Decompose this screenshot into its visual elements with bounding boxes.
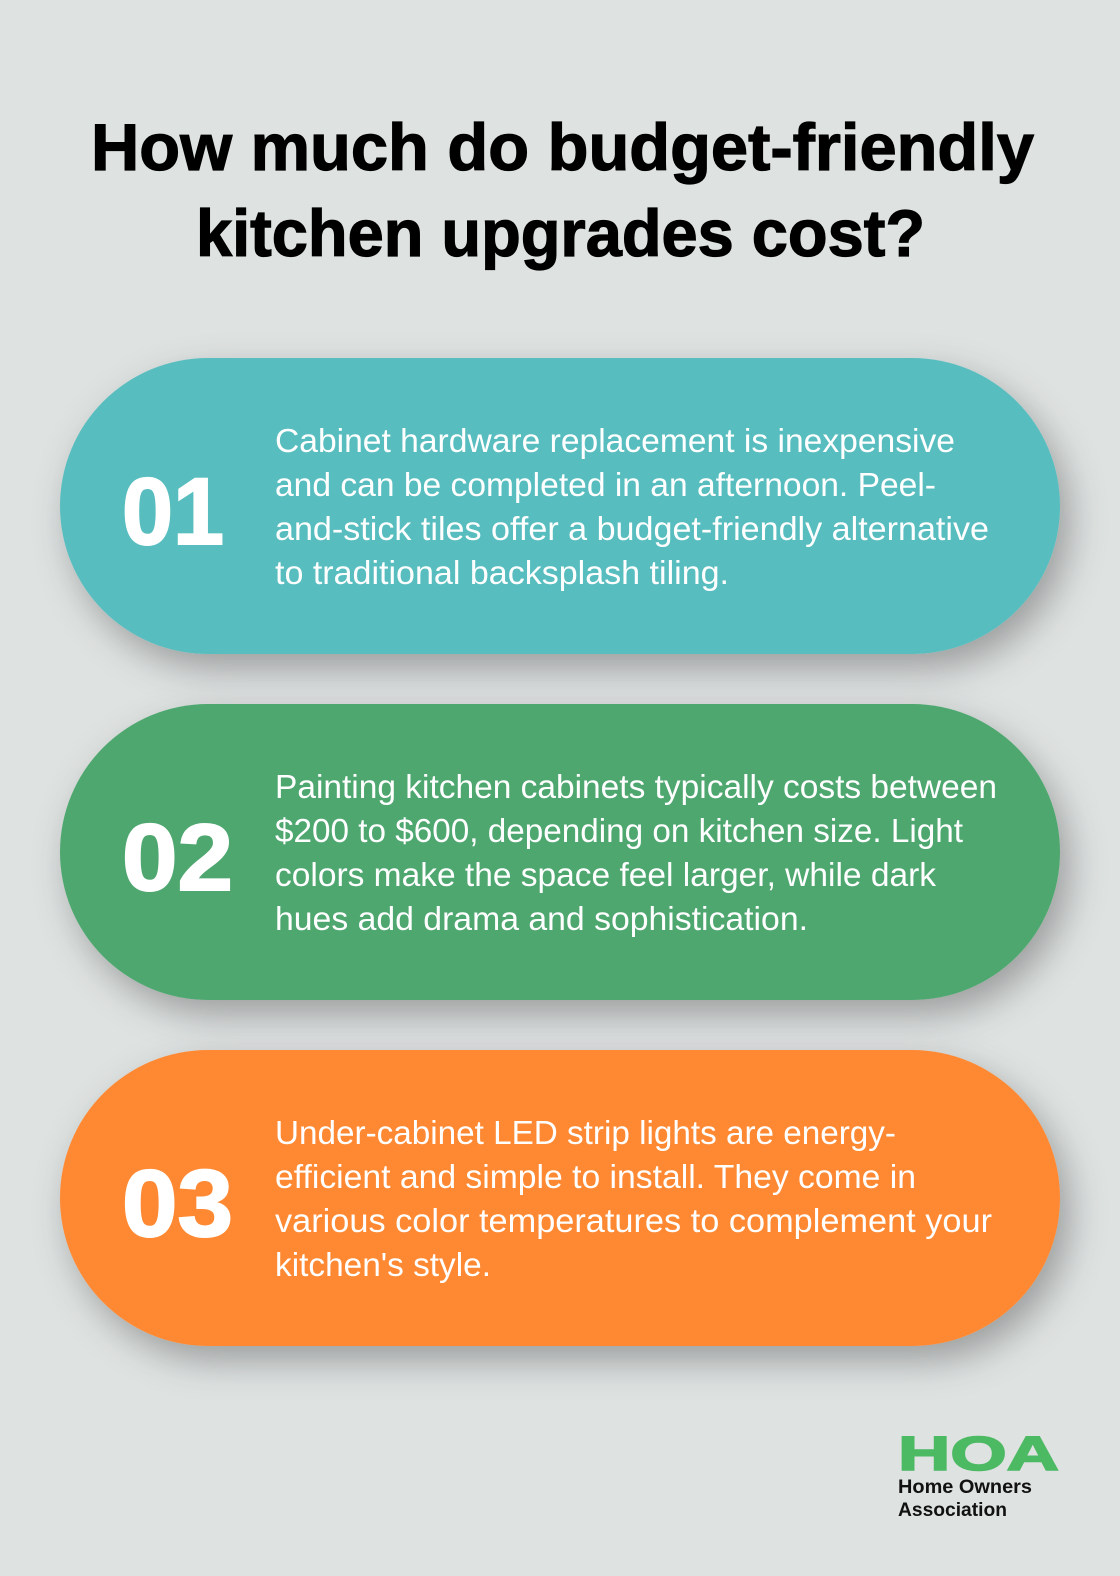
number 02: 02 (122, 805, 233, 911)
title: kitchen upgrades cost? (196, 196, 925, 270)
text block 02: hues add drama and sophistication. (275, 900, 808, 937)
pill background teal (60, 358, 1060, 654)
text block 03: various color temperatures to complement your (275, 1202, 992, 1239)
logo: HOA Home Owners Association: HOA (898, 1428, 1059, 1481)
text block 01: to traditional backsplash tiling. (275, 554, 729, 591)
panel: step 02 (60, 704, 1060, 1000)
text block 01 (275, 422, 989, 591)
logo: HOA Home Owners Association: Association (898, 1499, 1007, 1521)
title: How much do budget-friendly (91, 110, 1034, 184)
pill background green (60, 704, 1060, 1000)
logo: HOA Home Owners Association: Home Owners (898, 1476, 1032, 1498)
text block 01: and can be completed in an afternoon. Peel- (275, 466, 936, 503)
text block 03: efficient and simple to install. They come in (275, 1158, 916, 1195)
text block 02 (275, 768, 997, 937)
logo: HOA Home Owners Association (898, 1428, 1059, 1521)
panel: step 03 (60, 1050, 1060, 1346)
pill background orange (60, 1050, 1060, 1346)
panel: step 01 (60, 358, 1060, 654)
text block 02: colors make the space feel larger, while dark (275, 856, 937, 893)
text block 02: Painting kitchen cabinets typically costs between (275, 768, 997, 805)
number 03: 03 (122, 1151, 233, 1257)
text block 03: kitchen's style. (275, 1246, 491, 1283)
number 01: 01 (122, 459, 224, 565)
title (91, 110, 1034, 270)
text block 01: and-stick tiles offer a budget-friendly alternative (275, 510, 989, 547)
text block 03: Under-cabinet LED strip lights are energy- (275, 1114, 896, 1151)
text block 02: $200 to $600, depending on kitchen size. Light (275, 812, 963, 849)
text block 01: Cabinet hardware replacement is inexpensive (275, 422, 955, 459)
text block 03 (275, 1114, 992, 1283)
